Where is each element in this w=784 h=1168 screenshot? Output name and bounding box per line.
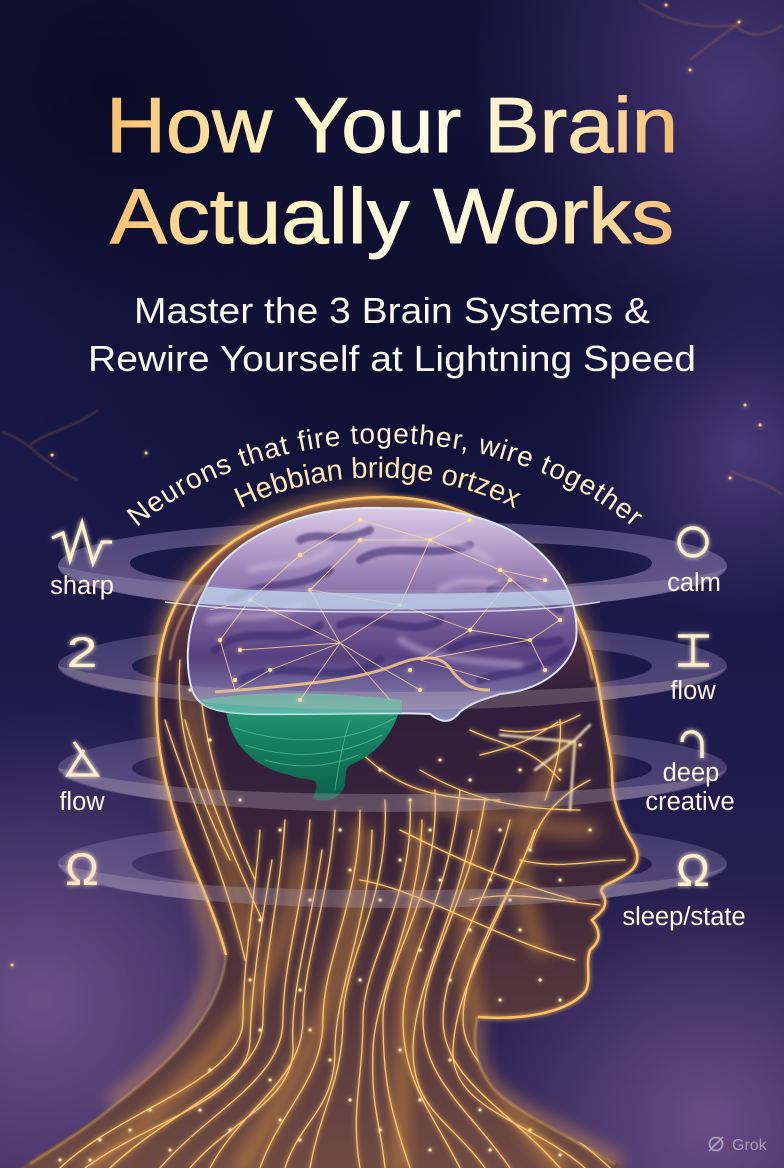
label: sharp: sharp <box>50 572 114 600</box>
cerebrum <box>188 508 576 721</box>
head outline <box>156 497 637 1018</box>
brain <box>188 508 576 801</box>
icon: sharp wave <box>52 523 112 563</box>
icon: numeral two: 2 <box>66 629 98 677</box>
orbit rings, rear layer <box>58 521 727 908</box>
folds <box>200 530 565 720</box>
icon: hook <box>682 732 702 758</box>
label: deep creative: creative <box>645 788 735 816</box>
head glow <box>110 497 620 1165</box>
title: How Your Brain <box>106 81 678 169</box>
icon: circle <box>679 528 707 556</box>
subtitle: Rewire Yourself at Lightning Speed <box>88 338 696 379</box>
curved sub-label: Hebbian bridge ortzex <box>234 456 521 508</box>
icon: omega: Ω <box>65 844 99 895</box>
icon: delta <box>68 742 97 775</box>
curved slogan: Neurons that fire together, wire together <box>126 424 642 526</box>
title: Actually Works <box>110 172 674 260</box>
neck outline, soft <box>30 955 615 1164</box>
neuron links <box>210 520 560 700</box>
label: calm: calm <box>667 569 721 597</box>
label: flow: flow <box>59 788 105 816</box>
front halves of orbit rings <box>58 566 727 908</box>
head silhouette with neural network <box>20 497 637 1168</box>
label: deep creative <box>645 759 735 816</box>
right wave icons and labels <box>622 528 746 931</box>
icon: I-beam <box>678 636 709 665</box>
golden filaments <box>60 640 625 1168</box>
head fill <box>20 497 637 1168</box>
label: flow: flow <box>670 677 716 705</box>
head rim, inner <box>170 512 592 680</box>
watermark: Grok <box>732 1137 768 1154</box>
temporal lobe fold <box>215 658 490 692</box>
green wash at base <box>200 693 402 714</box>
label: sleep/state: sleep/state <box>622 903 746 931</box>
subtitle: Master the 3 Brain Systems & <box>134 290 650 331</box>
subtitle <box>88 290 696 379</box>
watermark <box>709 1137 768 1154</box>
left wave icons and labels <box>50 523 114 895</box>
icon: omega: Ω <box>676 845 710 896</box>
label: deep creative: deep <box>663 759 719 787</box>
cerebellum <box>222 700 402 801</box>
title <box>106 81 678 260</box>
